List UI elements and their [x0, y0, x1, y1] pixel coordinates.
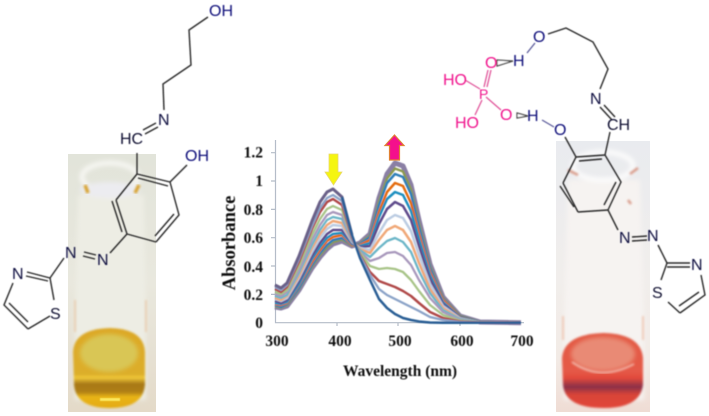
- y axis title: Absorbance: [220, 196, 240, 290]
- y axis tick labels: 1.2: [244, 144, 263, 162]
- molecule: left free ligand: OH: [209, 3, 233, 20]
- molecule: left free ligand: [4, 3, 233, 329]
- x axis tick labels: 700: [510, 333, 534, 350]
- y axis tick labels: 1: [255, 173, 263, 190]
- molecule: right phosphate-bound ligand: H: [527, 108, 539, 125]
- molecule: left free ligand: OH: [185, 148, 209, 165]
- y axis tick labels: 0.8: [244, 202, 263, 219]
- y axis tick labels: 0: [255, 315, 263, 332]
- molecule: right phosphate-bound ligand: HO: [443, 72, 467, 89]
- molecule: right phosphate-bound ligand: O: [554, 122, 566, 139]
- molecule: right phosphate-bound ligand: P: [479, 86, 488, 102]
- molecule: right phosphate-bound ligand: [443, 28, 705, 313]
- molecule: right phosphate-bound ligand: O: [533, 29, 545, 46]
- x axis tick labels: 500: [388, 333, 412, 350]
- molecule: left free ligand: HC: [120, 131, 143, 148]
- x axis tick labels: [265, 333, 534, 350]
- photo: yellow solution vial: [68, 154, 156, 412]
- molecule: right phosphate-bound ligand: N: [647, 228, 659, 245]
- molecule: right phosphate-bound ligand: CH: [607, 117, 630, 134]
- y axis tick labels: 0.6: [244, 230, 263, 247]
- molecule: right phosphate-bound ligand: H: [513, 53, 525, 70]
- molecule: right phosphate-bound ligand: N: [619, 230, 631, 247]
- y axis tick labels: 0.2: [244, 287, 263, 304]
- chart: absorbance spectra: [220, 135, 534, 380]
- molecule: right phosphate-bound ligand: N: [590, 91, 602, 108]
- liquid: [562, 333, 643, 408]
- molecule: right phosphate-bound ligand: O: [500, 107, 512, 124]
- axes: [271, 140, 524, 326]
- arrow: pink up: [385, 135, 404, 160]
- x axis tick labels: 400: [328, 333, 352, 350]
- molecule: left free ligand: N: [158, 112, 170, 129]
- x axis tick labels: 300: [265, 333, 289, 350]
- molecule: right phosphate-bound ligand: S: [652, 285, 663, 302]
- molecule: left free ligand: N: [97, 252, 109, 269]
- molecule: right phosphate-bound ligand: N: [691, 257, 703, 274]
- molecule: right phosphate-bound ligand: HO: [455, 115, 479, 132]
- x axis tick labels: 600: [450, 333, 474, 350]
- molecule: left free ligand: N: [12, 266, 24, 283]
- spectral curves: [275, 163, 521, 323]
- x axis title: Wavelength (nm): [343, 363, 457, 380]
- liquid: [73, 328, 145, 408]
- y axis tick labels: [244, 144, 263, 332]
- molecule: left free ligand: S: [50, 306, 61, 323]
- arrow: yellow down: [325, 154, 342, 185]
- molecule: right phosphate-bound ligand: O: [485, 55, 497, 72]
- y axis tick labels: 0.4: [244, 259, 263, 276]
- molecule: left free ligand: N: [65, 245, 77, 262]
- photo: red solution vial: [556, 141, 650, 412]
